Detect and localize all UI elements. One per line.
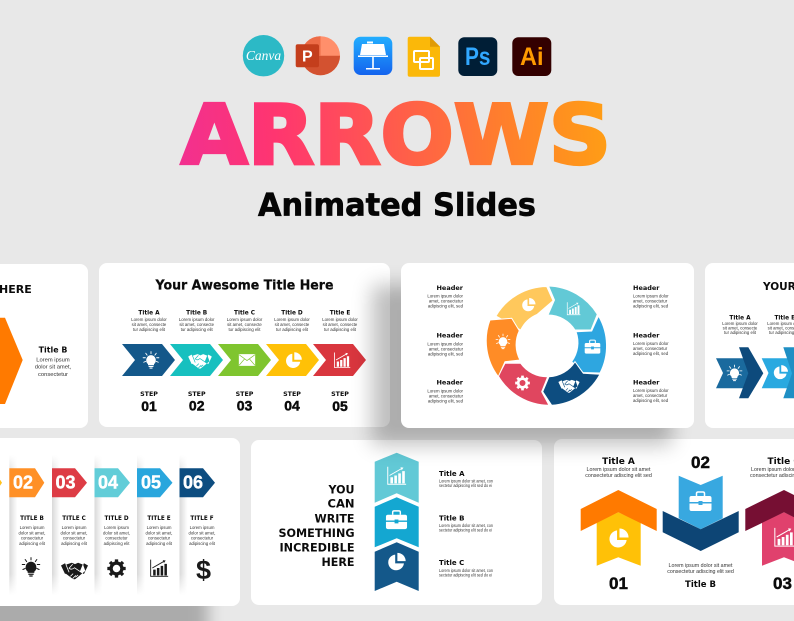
column texts [18,516,216,546]
step titles: sit amet, consecte [132,322,167,327]
step numbers: STEP [331,391,349,398]
step titles: Title A [138,310,160,316]
text: Title B: Title B [39,346,67,354]
text: Title B: Lorem ipsum [36,358,70,364]
column texts: adipiscing elit [19,541,46,546]
column texts: dolor sit amet, [188,530,216,536]
text: statement: WRITE [314,511,355,525]
text: Title B: consectetur adiscing elit sed [667,569,734,575]
arrow labels: Title A [439,470,465,478]
step titles: Title D [281,310,303,316]
step titles: tur adipiscing elit [181,327,214,332]
text: statement [278,482,355,569]
step titles: Lorem ipsum dolor [322,317,358,322]
step numbers: 02 [189,398,205,414]
right headers: adipiscing elit, sed [633,398,669,403]
step titles: sit amet, consecte [275,322,310,327]
titles: sit amet, consecte [723,326,758,330]
column texts: consectetur [105,536,128,540]
step titles: tur adipiscing elit [228,327,261,332]
titles: Lorem ipsum dolor [722,321,758,326]
ring icons [496,298,600,393]
icon: Canva: Canva [246,48,281,63]
tags: 03 [56,472,76,492]
text: statement: INCREDIBLE [280,540,355,554]
icon: Photoshop [458,37,497,76]
text: Title B: consectetur [38,372,68,378]
orange arrow [0,318,23,404]
tags: 05 [141,472,161,492]
fold shadows [9,455,187,595]
left headers: amet, consectetur [429,346,464,352]
left headers: Lorem ipsum dolor [427,294,464,298]
text: Title B [667,563,734,590]
text: Title A: Lorem ipsum dolor sit amet [587,467,651,473]
arrow labels: Lorem ipsum dolor sit amet, con [439,523,494,528]
step titles: Title B [186,310,208,316]
tags: 04 [98,472,118,492]
column icons: $ [196,555,211,585]
arrow labels [439,470,494,578]
text: statement: HERE [322,555,355,569]
left headers: amet, consectetur [429,394,464,398]
icon: PowerPoint: P [302,48,313,66]
left headers: amet, consectetur [429,298,464,304]
column texts: consectetur [191,536,214,540]
column icons [22,555,211,585]
step titles: Lorem ipsum dolor [179,317,215,322]
column texts: Lorem ipsum [104,525,129,530]
right headers: adipiscing elit, sed [633,351,669,356]
title: ARROWS [181,88,611,184]
titles [722,316,794,335]
step titles: tur adipiscing elit [133,327,166,332]
right headers: adipiscing elit, sed [633,304,669,308]
step numbers: 03 [237,398,252,414]
column texts: Lorem ipsum [190,525,215,530]
left headers: adipiscing elit, sed [428,304,464,308]
step titles: Lorem ipsum dolor [227,317,263,322]
text: Title A: consectetur adiscing elit sed [585,473,652,479]
shadow of numbered panel [0,585,208,621]
step titles: tur adipiscing elit [276,327,309,332]
icon: Photoshop: Ps [465,43,490,71]
panel: vertical arrows [251,440,542,605]
tags [0,468,215,497]
column texts: dolor sit amet, [18,530,46,536]
right headers: amet, consectetur [633,346,668,351]
step numbers [140,391,349,414]
step titles: Title C [234,310,255,316]
column texts: consectetur [21,536,44,540]
step numbers: STEP [188,391,206,398]
step numbers: 05 [332,398,348,414]
column texts: adipiscing elit [61,541,88,546]
step titles: Title E [330,310,350,316]
arrow labels: sectetur adipiscing elit sed do ei [439,483,492,488]
step numbers: 04 [284,398,300,414]
icon: PowerPoint [296,36,340,75]
ring segments [486,286,607,405]
right headers: Lorem ipsum dolor [633,388,669,393]
left headers [427,284,464,404]
left headers: Header [436,378,464,386]
arrow 02 [663,476,739,551]
arrow labels: sectetur adipiscing elit sed do ei [439,528,492,532]
tags: 06 [183,472,203,492]
right headers: Header [633,284,660,292]
chevron arrows [716,347,794,398]
right headers: Lorem ipsum dolor [633,341,669,346]
shadow of cycle panel [372,285,672,445]
panel: slide partial left top [0,264,88,428]
left headers: Header [436,284,464,292]
column texts: TITLE D [104,516,129,522]
arrow 01 [581,490,657,566]
arrow labels: Title C [439,559,464,567]
column texts: Lorem ipsum [20,525,45,530]
step titles: Lorem ipsum dolor [274,317,310,322]
column texts: dolor sit amet, [60,530,88,536]
column texts: Lorem ipsum [62,525,87,530]
step titles [131,310,358,332]
column texts: Lorem ipsum [147,525,172,530]
text: Title B: dolor sit amet, [35,364,72,370]
text: statement: SOMETHING [278,526,354,540]
right headers: Header [633,332,660,340]
right headers: Lorem ipsum dolor [633,294,669,298]
panel: house arrows [554,439,794,605]
right headers: amet, consectetur [633,393,668,398]
icon: Illustrator: Ai [520,43,544,71]
step titles: sit amet, consecte [227,322,262,327]
column texts: dolor sit amet, [146,530,172,536]
step titles: sit amet, consecte [179,322,215,327]
left headers: Header [436,332,464,340]
left headers: adipiscing elit, sed [428,352,464,356]
titles: Title A [729,316,751,322]
text: statement: YOU [328,482,354,496]
column texts: adipiscing elit [189,541,216,546]
heading: Your Awesome Title Here [155,277,334,293]
column texts: consectetur [148,536,171,540]
subtitle: Animated Slides [258,188,536,224]
arrow labels: sectetur adipiscing elit sed do ei [439,572,492,578]
arrow labels: Lorem ipsum dolor sit amet, con [439,478,494,484]
number 03: 03 [773,574,792,593]
arrow labels: Lorem ipsum dolor sit amet, con [439,568,494,573]
arrow 03 [745,490,794,566]
panel: cycle diagram [401,263,694,428]
text: Title C [750,457,794,479]
step titles: sit amet, consecte [323,322,358,327]
step numbers: STEP [283,391,301,398]
stacked arrows [375,453,419,591]
text: Title B: Title B [685,580,716,590]
column texts: dolor sit amet, [103,530,130,536]
panel: five step chevrons [99,263,390,427]
text: Title B: Lorem ipsum dolor sit amet [669,563,733,569]
app icons row [243,35,551,77]
titles: tur adipiscing elit [724,330,757,335]
step titles: tur adipiscing elit [324,327,357,332]
text: Title B [35,346,72,378]
tags: 02 [13,472,33,492]
column texts: consectetur [63,536,86,540]
number 02: 02 [691,453,710,472]
icon: Canva [243,35,284,76]
arrow labels: Title B [439,514,464,522]
text: statement: CAN [328,497,354,511]
step numbers: STEP [140,391,158,398]
right headers: Header [633,378,660,386]
column texts: adipiscing elit [104,541,130,546]
icon: Google Slides [408,37,440,77]
step numbers: STEP [236,391,254,398]
column texts: adipiscing elit [146,541,173,546]
text: Title A [585,457,652,479]
column texts: TITLE B [20,516,44,522]
chevron arrows [122,344,366,376]
left headers: Lorem ipsum dolor [427,388,464,394]
step titles: Lorem ipsum dolor [131,317,167,322]
right headers [633,284,669,403]
left headers: Lorem ipsum dolor [427,342,464,346]
right headers: amet, consectetur [633,298,668,304]
column texts: TITLE E [147,516,171,522]
panel: six numbered tags [0,438,240,606]
column texts: TITLE F [190,516,214,522]
number 01: 01 [609,574,628,593]
icon: Keynote [354,37,392,75]
column texts: TITLE C [62,516,86,522]
left headers: adipiscing elit, sed [428,398,464,404]
panel: partial right slide [705,263,794,428]
text: Title A: Title A [602,457,635,467]
step numbers: 01 [141,398,157,414]
icon: Illustrator [512,37,551,76]
